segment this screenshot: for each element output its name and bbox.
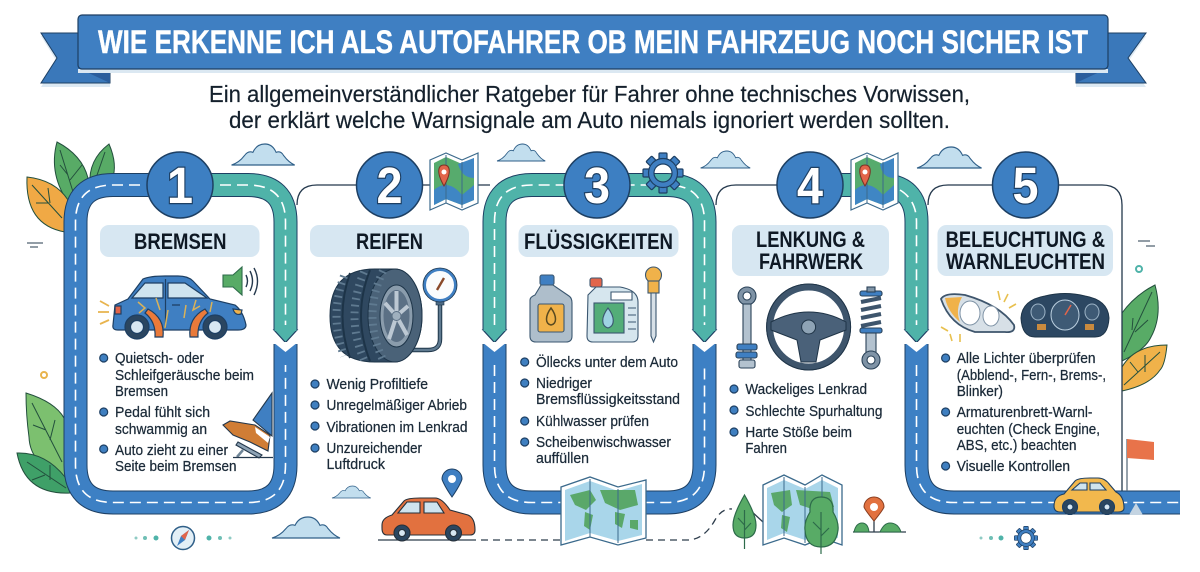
- number badges: [147, 152, 1058, 218]
- icon: world map 4: [763, 475, 842, 545]
- bottom path line: [378, 509, 763, 540]
- list: Flüssigkeiten: [521, 353, 680, 467]
- list: Reifen: Luftdruck: [326, 456, 385, 473]
- list: Flüssigkeiten: Niedriger: [536, 375, 592, 392]
- icon: headlight: [941, 291, 1016, 342]
- heading: Lenkung und Fahrwerk: LENKUNG &: [756, 227, 865, 252]
- icon: world map 3: [561, 477, 646, 545]
- icon: tire with pressure gauge: [330, 268, 457, 362]
- list: Bremsen: [100, 350, 254, 475]
- number badges: 4: [797, 157, 824, 214]
- list: Reifen: Vibrationen im Lenkrad: [326, 419, 468, 436]
- icon: leaves bottom left: [17, 393, 70, 493]
- list: Bremsen: Schleifgeräusche beim: [115, 367, 254, 384]
- heading: Bremsen: BREMSEN: [134, 229, 226, 254]
- subtitle: der erklärt welche Warnsignale am Auto niemals ignoriert werden sollten.: [229, 107, 950, 133]
- icon: dipstick: [646, 267, 662, 342]
- list: Bremsen: Quietsch- oder: [115, 350, 204, 367]
- list: Flüssigkeiten: Bremsflüssigkeitsstand: [536, 391, 680, 408]
- road: panel 1: [76, 185, 298, 502]
- list: Beleuchtung und Warnleuchten: Armaturenbrett-Warnl-: [957, 404, 1092, 421]
- list: Beleuchtung und Warnleuchten: [942, 350, 1106, 475]
- list: Reifen: Unzureichender: [326, 440, 422, 457]
- list: Beleuchtung und Warnleuchten: (Abblend-, Fern-, Brems-,: [957, 367, 1106, 384]
- icon: speaker: [223, 267, 258, 295]
- heading: Reifen: REIFEN: [356, 229, 423, 254]
- road: panel 3: [482, 185, 717, 502]
- heading: Flüssigkeiten: FLÜSSIGKEITEN: [524, 229, 673, 254]
- heading: Bremsen: [100, 225, 260, 257]
- small decor marks: [27, 241, 1155, 378]
- heading: Lenkung und Fahrwerk: FAHRWERK: [759, 249, 863, 274]
- list: Lenkung und Fahrwerk: Fahren: [745, 440, 787, 457]
- number badges: 2: [376, 157, 402, 214]
- decorative clouds: [232, 144, 982, 538]
- list: Beleuchtung und Warnleuchten: Alle Lichter überprüfen: [957, 350, 1096, 367]
- list: Flüssigkeiten: Öllecks unter dem Auto: [536, 353, 678, 371]
- icon: blue pin: [442, 469, 462, 497]
- icon: leaves top left: [27, 142, 114, 232]
- list: Lenkung und Fahrwerk: Schlechte Spurhaltung: [745, 403, 882, 420]
- heading: Beleuchtung und Warnleuchten: [938, 225, 1113, 276]
- list: Beleuchtung und Warnleuchten: Visuelle Kontrollen: [957, 458, 1070, 475]
- subtitle: [209, 81, 970, 133]
- heading: Beleuchtung und Warnleuchten: BELEUCHTUNG &: [946, 227, 1105, 252]
- heading: Lenkung und Fahrwerk: [732, 225, 889, 276]
- icon: orange pin with bushes: [853, 497, 906, 532]
- road: panel 4 to 5: [840, 185, 1180, 515]
- icon: flag: [1127, 439, 1154, 491]
- heading: Flüssigkeiten: [518, 225, 678, 257]
- list: Beleuchtung und Warnleuchten: euchten (Check Engine,: [957, 421, 1100, 438]
- number badges: 3: [584, 157, 610, 214]
- list: Lenkung und Fahrwerk: Wackeliges Lenkrad: [745, 381, 867, 398]
- icon: coolant canister: [587, 278, 638, 342]
- icon: map 4: [851, 153, 898, 210]
- list: Reifen: Unregelmäßiger Abrieb: [326, 397, 467, 414]
- icon: tree large: [805, 497, 838, 554]
- icon: shock absorber: [860, 287, 882, 369]
- icon: orange car: [382, 498, 475, 541]
- banner: [41, 15, 1146, 87]
- icon: yellow car: [1054, 478, 1124, 514]
- icon: oil bottle: [530, 275, 572, 342]
- icon: gear top: [643, 153, 683, 193]
- number badges: 1: [167, 157, 193, 214]
- list: Bremsen: Bremsen: [115, 383, 168, 400]
- icon: tie rod: [736, 287, 757, 368]
- list: Flüssigkeiten: Kühlwasser prüfen: [536, 413, 649, 430]
- list: Lenkung und Fahrwerk: [730, 381, 882, 457]
- list: Bremsen: schwammig an: [115, 421, 207, 438]
- list: Bremsen: Auto zieht zu einer: [115, 442, 228, 459]
- list: Flüssigkeiten: auffüllen: [536, 450, 589, 467]
- list: Beleuchtung und Warnleuchten: Blinker): [957, 383, 1003, 400]
- panel outlines 2, 4, 5: [297, 185, 1122, 491]
- subtitle: Ein allgemeinverständlicher Ratgeber für Fahrer ohne technisches Vorwissen,: [209, 81, 970, 107]
- heading: Beleuchtung und Warnleuchten: WARNLEUCHTEN: [946, 249, 1105, 274]
- icon: tree small: [733, 495, 756, 549]
- icon: foot on pedal: [223, 393, 273, 458]
- icon: blue car with worn brakes: [98, 276, 246, 339]
- icon: leaves right: [1122, 285, 1167, 391]
- number badges: 5: [1012, 157, 1038, 214]
- list: Lenkung und Fahrwerk: Harte Stöße beim: [745, 424, 852, 441]
- icon: dashboard: [1021, 294, 1109, 337]
- list: Flüssigkeiten: Scheibenwischwasser: [536, 434, 671, 451]
- list: Reifen: Wenig Profiltiefe: [326, 376, 428, 393]
- heading: Reifen: [310, 225, 469, 257]
- icon: steering wheel: [767, 284, 851, 370]
- list: Beleuchtung und Warnleuchten: ABS, etc.) beachten: [957, 437, 1076, 454]
- icon: compass with dots: [134, 526, 232, 550]
- icon: map 2: [430, 153, 478, 210]
- list: Bremsen: Seite beim Bremsen: [115, 458, 236, 475]
- list: Reifen: [311, 376, 468, 473]
- icon: gear with dots: [980, 526, 1038, 550]
- list: Bremsen: Pedal fühlt sich: [115, 404, 210, 421]
